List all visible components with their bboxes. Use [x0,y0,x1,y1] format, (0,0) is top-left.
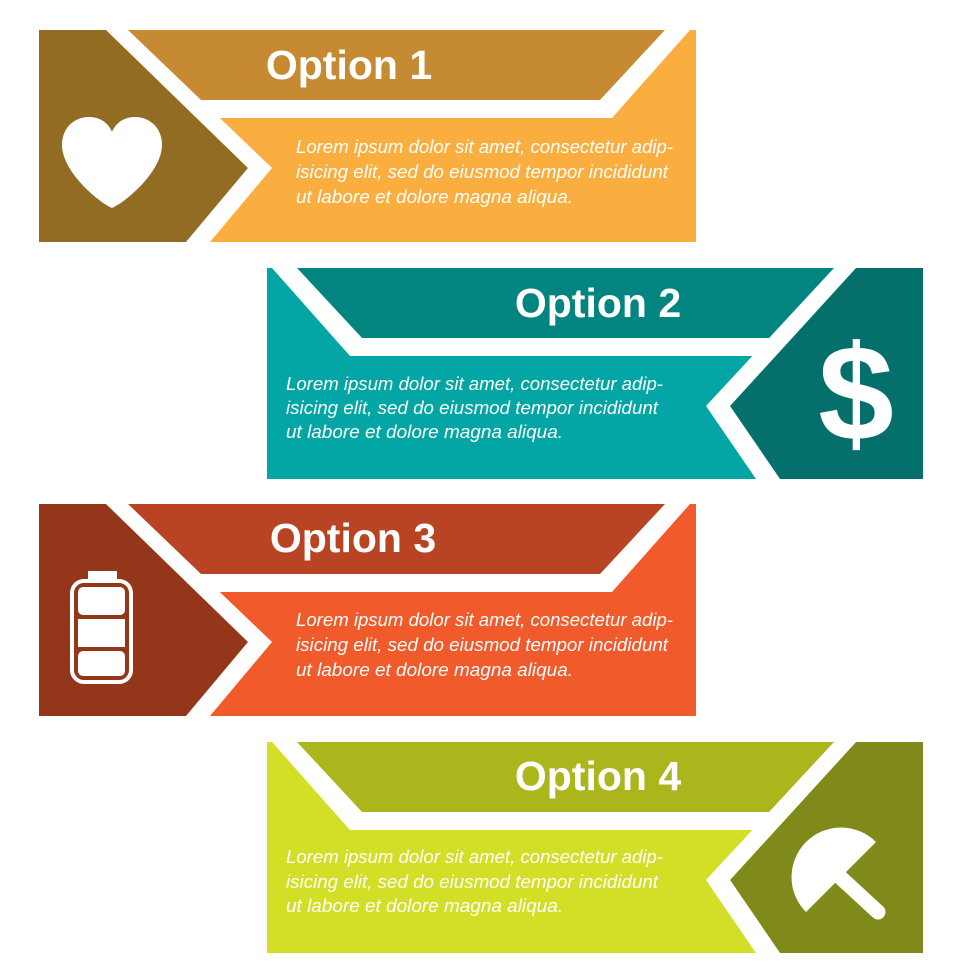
panel: option 4 [267,742,923,953]
text block: option 1: isicing elit, sed do eiusmod tempor incididunt [296,162,669,182]
text block: option 2: ut labore et dolore magna aliqua. [286,422,563,442]
heading: option 4: Option 4 [515,753,681,799]
text block: option 4: isicing elit, sed do eiusmod tempor incididunt [286,872,659,892]
panel: option 2 [267,268,923,479]
icon: dollar: $ [818,317,894,469]
text block: option 2: Lorem ipsum dolor sit amet, consectetur adip- [286,374,663,394]
text block: option 2: isicing elit, sed do eiusmod tempor incididunt [286,398,659,418]
panel: option 3 [39,504,696,716]
text block: option 3: ut labore et dolore magna aliqua. [296,660,573,680]
text block: option 1: Lorem ipsum dolor sit amet, consectetur adip- [296,137,673,157]
icon: umbrella [792,828,878,912]
text block: option 3: Lorem ipsum dolor sit amet, consectetur adip- [296,610,673,630]
panel: option 1 [39,30,696,242]
icon: heart [62,117,162,208]
text block: option 3: isicing elit, sed do eiusmod tempor incididunt [296,635,669,655]
text block: option 1: ut labore et dolore magna aliqua. [296,187,573,207]
text block: option 4: Lorem ipsum dolor sit amet, consectetur adip- [286,847,663,867]
text block: option 4: ut labore et dolore magna aliqua. [286,896,563,916]
heading: option 3: Option 3 [270,515,436,561]
heading: option 1: Option 1 [266,42,432,88]
heading: option 2: Option 2 [515,280,681,326]
icon: battery [72,571,131,682]
